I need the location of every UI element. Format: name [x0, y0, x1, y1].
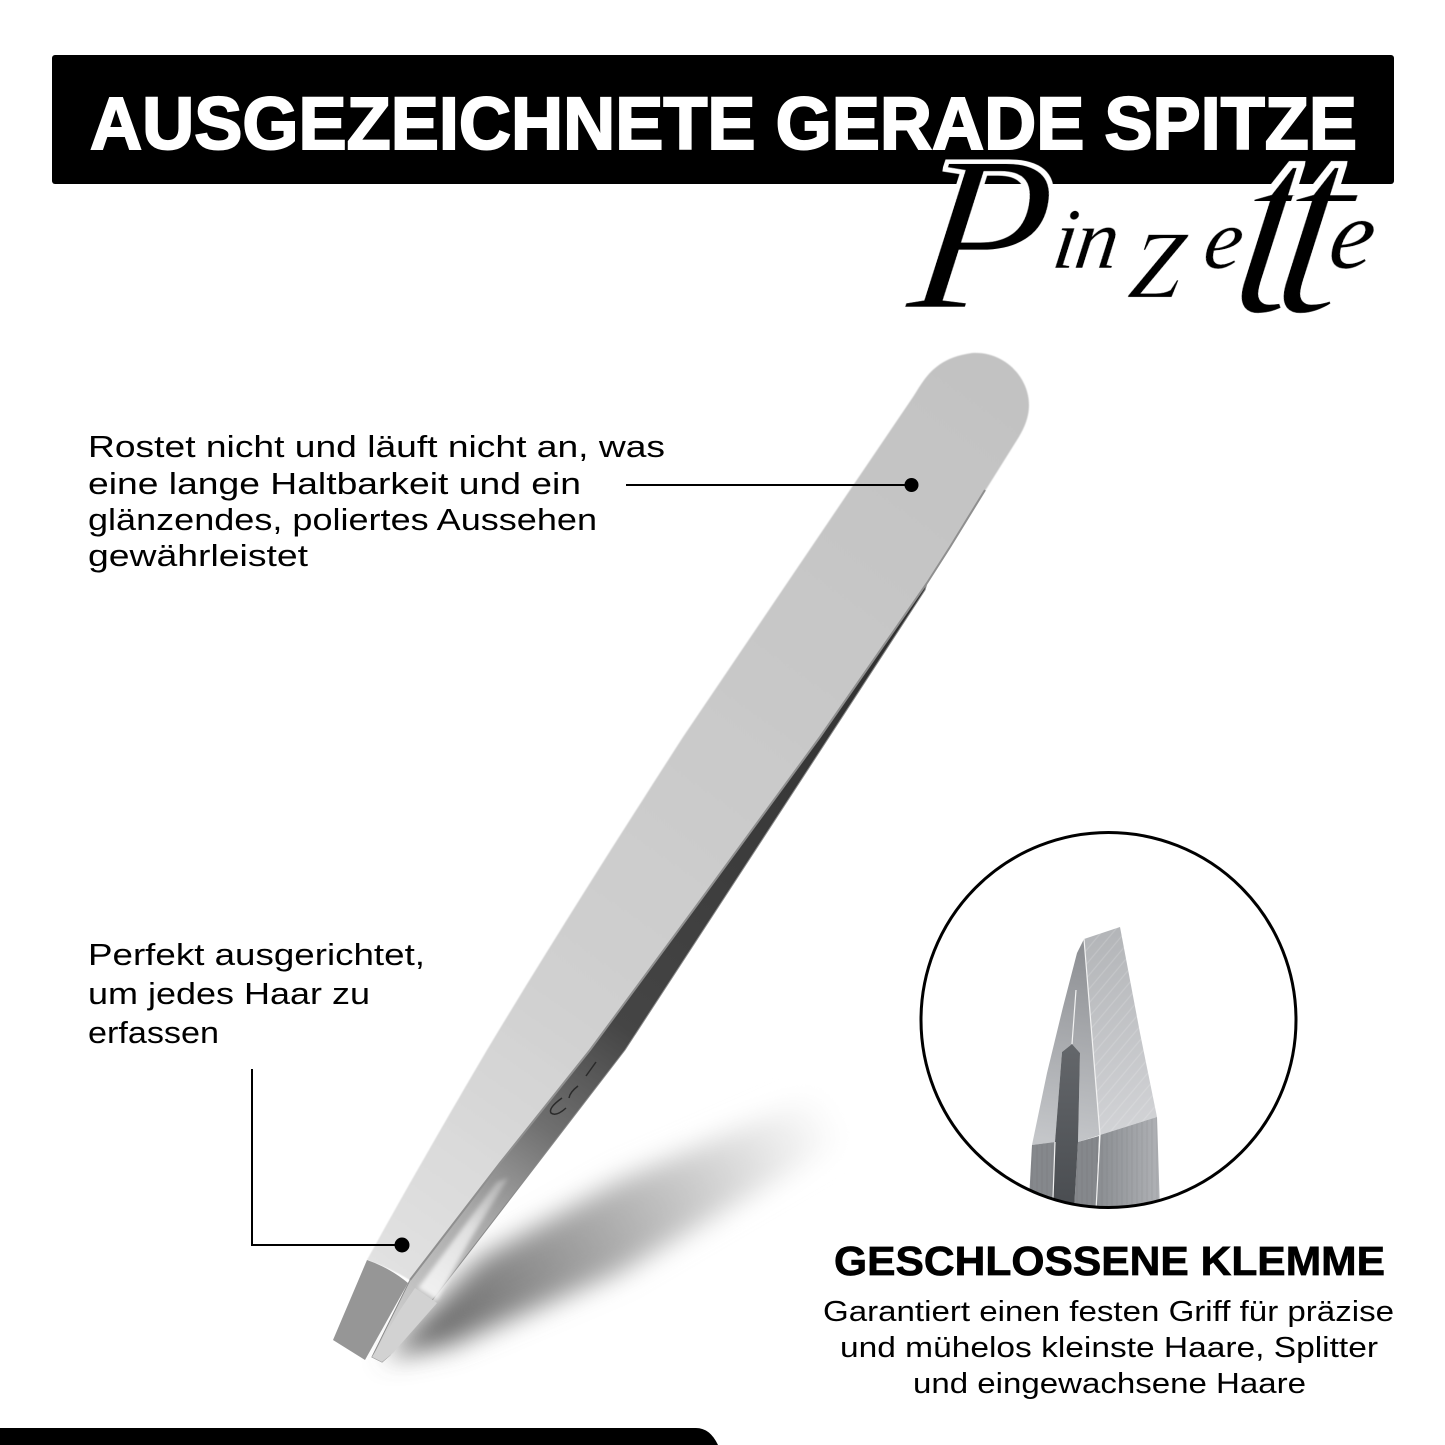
lower middle section [1074, 1136, 1099, 1210]
lower blade highlight [418, 1178, 508, 1300]
callout: rust resistance [88, 429, 918, 573]
caption text: und eingewachsene Haare [913, 1368, 1306, 1400]
right facet [1084, 927, 1157, 1135]
lower blade tip [372, 1288, 437, 1362]
bottom black tab [0, 1428, 718, 1445]
circle outline [921, 832, 1296, 1208]
facet highlight lines [1053, 939, 1100, 1210]
callout text: Rostet nicht und läuft nicht an, was [88, 429, 665, 464]
brushed texture [1082, 1117, 1158, 1206]
caption heading: GESCHLOSSENE KLEMME [834, 1238, 1385, 1284]
script subtitle: e [1199, 191, 1250, 287]
lower right section [1096, 1117, 1160, 1210]
tip bevel [333, 1260, 408, 1360]
header bar with title [52, 55, 1394, 184]
cast shadow [385, 1085, 860, 1358]
callout text: glänzendes, poliertes Aussehen [88, 502, 597, 537]
engraving [550, 1062, 596, 1114]
blade edge line [410, 490, 985, 1280]
circular tip detail [921, 832, 1296, 1210]
left facet [1032, 939, 1100, 1145]
lower left section [1030, 1142, 1054, 1198]
callout: alignment [88, 937, 434, 1252]
title: AUSGEZEICHNETE GERADE SPITZE [90, 82, 1357, 165]
central slit [1053, 1044, 1080, 1210]
script subtitle: t [1258, 79, 1381, 370]
caption text: Garantiert einen festen Griff für präzise [823, 1296, 1394, 1328]
script subtitle: t [1216, 79, 1339, 370]
script subtitle: P [896, 111, 1068, 357]
leader line with dot [252, 1069, 410, 1252]
upper blade face [367, 353, 1029, 1280]
lower blade [372, 583, 927, 1362]
script subtitle: z [1122, 175, 1200, 329]
script subtitle: n [1070, 191, 1126, 287]
callout text: eine lange Haltbarkeit und ein [88, 466, 581, 501]
closed clamp caption [823, 1238, 1402, 1400]
callout text: Perfekt ausgerichtet, [88, 937, 425, 972]
callout text: um jedes Haar zu [88, 976, 370, 1011]
callout text: erfassen [88, 1015, 219, 1050]
caption text: und mühelos kleinste Haare, Splitter [840, 1332, 1378, 1364]
tweezers photo illustration [333, 353, 1029, 1362]
script subtitle: e [1323, 178, 1383, 290]
script subtitle: i [1048, 191, 1085, 287]
magnified tip [1029, 927, 1160, 1210]
leader line with dot [626, 478, 918, 492]
callout text: gewährleistet [88, 538, 308, 573]
